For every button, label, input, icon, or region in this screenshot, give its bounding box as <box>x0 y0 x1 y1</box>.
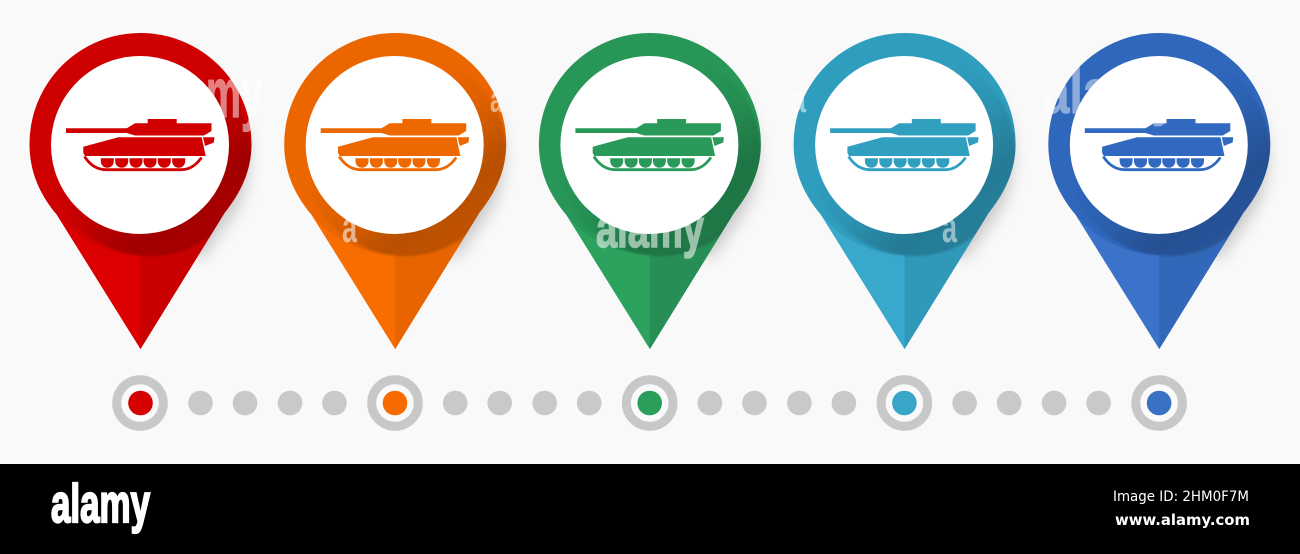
footer band <box>0 464 1300 554</box>
image id: Image ID: 2HM0F7M <box>1113 489 1249 505</box>
pin: green tank <box>539 33 761 349</box>
white disc <box>815 56 993 234</box>
white disc <box>1070 56 1248 234</box>
watermark: a over orange pin, right: a <box>490 79 504 120</box>
watermark: a over orange pin, left: a <box>342 203 357 252</box>
white disc <box>306 56 484 234</box>
watermark: alamy over blue pin: alamy <box>1043 58 1178 127</box>
timeline steps 2 <box>443 391 602 415</box>
pin: blue tank <box>1048 33 1271 349</box>
icon: blue tank <box>1085 119 1233 170</box>
pin: teal tank <box>794 33 1016 349</box>
timeline marker: green <box>626 380 673 426</box>
watermark: alamy over green pin: alamy <box>596 199 704 259</box>
timeline dots <box>117 380 1182 426</box>
white disc <box>51 56 229 234</box>
icon: teal tank <box>830 119 979 170</box>
timeline marker: teal <box>881 380 928 426</box>
timeline marker: blue <box>1136 380 1182 426</box>
logo: alamy: alamy <box>51 474 150 534</box>
timeline marker: red <box>117 380 163 426</box>
watermark: alamy over red pin: alamy <box>151 54 263 132</box>
icon: orange tank <box>321 119 469 170</box>
watermark: a over teal pin, left: a <box>790 77 807 121</box>
watermark: a over teal pin, right: a <box>942 203 957 252</box>
timeline steps 1 <box>188 391 347 415</box>
website: www.alamy.com <box>1115 511 1250 529</box>
icon: red tank <box>66 119 214 170</box>
timeline marker: orange <box>372 380 418 426</box>
timeline steps 4 <box>952 391 1111 415</box>
pin: red tank <box>30 33 252 349</box>
white disc <box>560 56 738 234</box>
timeline steps 3 <box>698 391 856 415</box>
icon: green tank <box>575 119 724 170</box>
pin: orange tank <box>284 33 507 349</box>
